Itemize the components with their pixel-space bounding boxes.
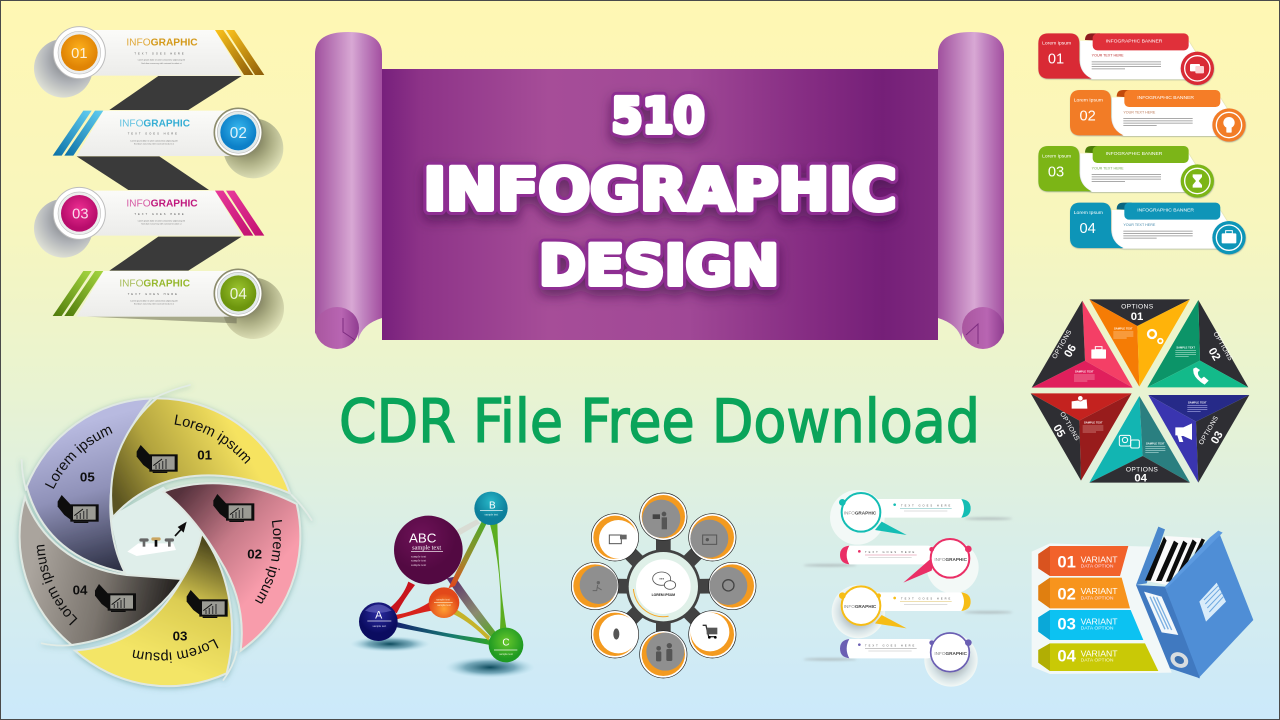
circle ABC: sample text [412,544,441,551]
banner 03: Sed diam nonummy nibh euismod tincidunt ut [141,223,182,226]
option 05: SAMPLE TEXT [1084,421,1103,425]
scroll banner sheet [382,69,938,340]
title: 510 INFOGRAPHIC DESIGN: DESIGN [539,234,779,298]
circle B: sample text [485,512,498,516]
blade 02: Lorem ipsum [255,520,282,604]
step pink: INFOGRAPHIC [934,557,968,562]
subtitle: CDR File Free Download: CDR File Free Download [339,387,980,457]
banner 04: TEXT GOES HERE [128,292,179,296]
card 04: INFOGRAPHIC BANNER [1137,208,1194,214]
banner 04: Sed diam nonummy nibh euismod tincidunt ut [134,303,175,306]
card 04: YOUR TEXT HERE [1123,223,1156,227]
option 04 [1089,396,1190,485]
circle C: C [502,638,510,649]
circle ABC: sample text [411,563,426,567]
banner 01: Lorem ipsum dolor sit amet consectetur adipiscing elit [138,59,185,62]
circle B: B [489,500,496,511]
links [389,519,507,645]
step pink: TEXT GOES HERE [865,550,916,554]
icon: phone [1193,367,1209,385]
banner 04: Lorem ipsum dolor sit amet consectetur adipiscing elit [130,300,178,303]
blade 01: Lorem ipsum [174,414,250,464]
circle ABC: ABC [409,531,437,546]
banner 02: Sed diam nonummy nibh euismod tincidunt ut [134,142,175,145]
centre hub: ••• [659,576,664,581]
blade 03: Lorem ipsum [132,638,218,663]
banner 01 [34,27,264,98]
node upper right [689,514,736,561]
circle A: sample text [373,624,386,628]
step teal: TEXT GOES HERE [901,503,952,507]
title: 510 INFOGRAPHIC DESIGN: INFOGRAPHIC [424,156,896,224]
option 03: 03 [1209,429,1226,446]
option 02: OPTIONS [1212,331,1234,363]
tab 01 [1038,546,1128,576]
card 01: YOUR TEXT HERE [1092,54,1124,58]
blade 03: 03 [173,629,187,644]
centre hub [629,552,698,621]
panel: flower diagram [571,493,756,678]
circle B [474,492,508,525]
blade 03 [72,536,236,692]
tab 01: 01 [1057,552,1076,571]
banner 03 [34,187,264,258]
icon: megaphone [1175,423,1192,442]
blade 01 [110,396,293,516]
icon: map pin [1072,396,1087,409]
title: 510 INFOGRAPHIC DESIGN: DESIGN [539,234,779,298]
step yellow [832,585,1012,638]
card 01 [1038,33,1214,85]
option 03: SAMPLE TEXT [1188,400,1207,404]
option 01: OPTIONS [1121,304,1154,311]
step teal [830,490,1012,545]
banner 01: 01 [71,46,87,62]
card 03: INFOGRAPHIC BANNER [1106,151,1163,157]
circle A: A [375,610,383,622]
blade 05 [24,396,154,573]
node lower left [591,611,639,658]
swoosh tails [22,385,312,680]
tab 04 [1038,643,1158,671]
banner 03: 03 [72,207,88,223]
option 03 [1148,395,1249,483]
blade 02 [165,480,304,655]
binder [1136,527,1253,678]
banner 02: 02 [230,125,247,142]
panel: zig-zag infographic banners [34,27,284,339]
banner 01: TEXT GOES HERE [134,52,186,56]
banner 02: INFOGRAPHIC [119,118,190,129]
card 02 [1070,90,1246,142]
panel: infographic banner cards [1038,33,1246,254]
node right [709,562,756,610]
node bottom [640,631,687,678]
tab 03: DATA OPTION [1081,626,1114,632]
blade 05: 05 [80,470,95,485]
right scroll roller [938,32,1004,349]
tab 02: VARIANT [1081,586,1118,596]
icon: gears [1148,330,1163,343]
card 02: INFOGRAPHIC BANNER [1137,95,1194,101]
option 06: SAMPLE TEXT [1075,370,1094,374]
node left [571,562,619,610]
circle ABC: sample text [411,559,426,563]
step purple: INFOGRAPHIC [934,651,968,656]
circle ABC: sample text [411,554,426,558]
icon: light bulb [1223,117,1235,133]
blade 01: 01 [197,447,213,462]
banner 04 [53,269,284,339]
dark connector bands [77,76,242,271]
option 05: OPTIONS [1058,411,1081,443]
blade 04 [16,494,180,649]
card 03: Lorem Ipsum [1042,153,1071,159]
step purple: TEXT GOES HERE [865,643,916,647]
circle C: sample text [499,652,513,656]
blade 02: 02 [247,546,262,561]
option 05: 05 [1050,423,1067,440]
card 01: 01 [1048,52,1064,68]
panel: purple scroll title [315,32,1004,349]
centre orange circle: sample text [436,597,450,601]
icon: speech bubbles [1119,435,1139,448]
card 03: 03 [1048,164,1064,180]
node lower right [689,611,736,658]
option 06: 06 [1062,343,1079,360]
option 02: 02 [1206,346,1222,363]
tab 01: VARIANT [1081,554,1118,564]
centre orange circle: sample text [437,603,451,607]
card 01: INFOGRAPHIC BANNER [1106,38,1163,44]
banner 04: INFOGRAPHIC [119,279,190,290]
banner 03: Lorem ipsum dolor sit amet consectetur adipiscing elit [138,220,185,223]
centre icon: team and arrow [127,522,187,556]
card 04: 04 [1080,221,1096,237]
step teal: INFOGRAPHIC [844,511,877,516]
option 03: OPTIONS [1198,415,1220,446]
step purple [803,633,978,687]
option 06 [1032,301,1133,388]
tab 02: DATA OPTION [1081,595,1114,601]
card 04: Lorem Ipsum [1074,210,1103,216]
card 01: Lorem Ipsum [1042,41,1071,47]
option 01: 01 [1131,311,1143,323]
swirl centre [110,487,207,583]
tab 03: VARIANT [1081,617,1118,627]
centre hub: LOREM IPSUM [652,593,675,597]
option 05 [1031,393,1132,481]
circle C [489,628,523,662]
step pink [803,539,979,593]
card 02: 02 [1080,108,1096,124]
title: 510 INFOGRAPHIC DESIGN: 510 [612,88,704,144]
panel: binder with variant tabs [1032,527,1253,678]
option 02: SAMPLE TEXT [1176,345,1195,349]
title: 510 INFOGRAPHIC DESIGN: INFOGRAPHIC [424,156,896,224]
icon: briefcase [1222,231,1236,243]
banner 02: Lorem ipsum dolor sit amet consectetur adipiscing elit [130,139,178,142]
icon: hourglass [1193,174,1202,188]
card 03: YOUR TEXT HERE [1092,166,1124,170]
card 03 [1038,146,1214,198]
option 04: SAMPLE TEXT [1146,441,1165,445]
title: 510 INFOGRAPHIC DESIGN: 510 [612,88,704,144]
panel: molecule diagram [350,492,535,678]
icon: briefcase [1091,347,1106,359]
connector star [607,530,720,643]
panel: hexagon options [1031,299,1249,485]
option 01: SAMPLE TEXT [1114,327,1133,331]
title: 510 INFOGRAPHIC DESIGN [424,88,896,298]
tab 02: 02 [1057,584,1076,603]
tab 01: DATA OPTION [1081,564,1114,570]
banner 01: Sed diam nonummy nibh euismod tincidunt ut [141,62,182,65]
tab 02 [1038,578,1130,608]
banner 02: TEXT GOES HERE [128,132,179,136]
tab 04: DATA OPTION [1081,657,1114,663]
option 02 [1147,300,1248,387]
step yellow: TEXT GOES HERE [901,597,952,601]
tab 03 [1038,610,1143,640]
option 01 [1089,299,1190,387]
tab 04: VARIANT [1081,648,1118,658]
left scroll roller [315,32,382,349]
option 04: OPTIONS [1126,466,1158,473]
node top [640,493,687,540]
tab 03: 03 [1057,615,1076,634]
icon: chat [1190,64,1204,73]
centre orange circle [429,587,459,618]
banner 03: TEXT GOES HERE [134,212,186,216]
banner 03: INFOGRAPHIC [126,198,198,209]
blade 04: 04 [73,582,88,597]
banner 02 [53,108,283,178]
circle ABC [394,516,463,584]
circle A [359,602,398,641]
banner 04: 04 [230,286,247,303]
blade 05: Lorem ipsum [44,426,112,489]
panel: speech-bubble steps [803,490,1012,687]
tab 04: 04 [1057,646,1077,665]
option 04: 04 [1134,473,1148,485]
banner 01: INFOGRAPHIC [126,38,198,49]
node upper left [591,514,639,561]
card 04 [1070,203,1246,254]
step yellow: INFOGRAPHIC [844,604,877,609]
blade 04: Lorem ipsum [36,544,78,626]
panel: swirl diagram [16,384,314,692]
white page backing [1032,543,1172,674]
card 02: Lorem Ipsum [1074,97,1103,103]
option 06: OPTIONS [1051,329,1074,360]
floor shadows [350,636,535,678]
card 02: YOUR TEXT HERE [1123,110,1156,114]
